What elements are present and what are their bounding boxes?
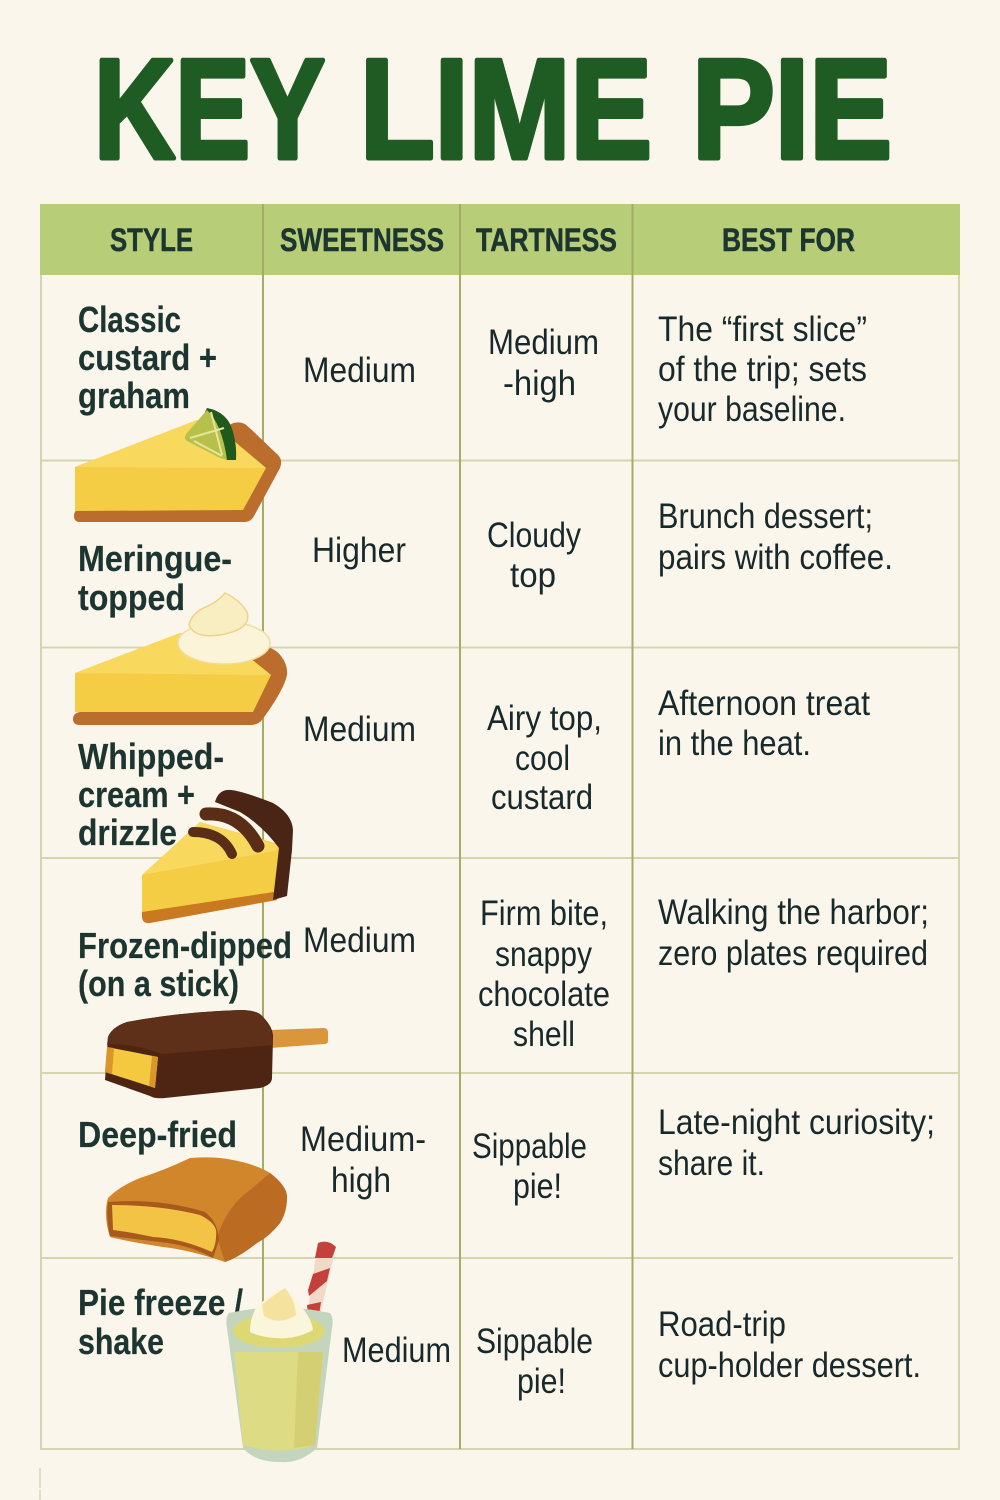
- tartness column: [472, 323, 610, 1401]
- style column labels: graham: [78, 375, 190, 416]
- tartness column: shell: [513, 1015, 575, 1054]
- tartness column: Firm bite,: [480, 894, 608, 933]
- icon: deep-fried pie: [106, 1157, 287, 1262]
- tartness column: cool: [515, 739, 570, 778]
- sweetness column: Medium-: [300, 1120, 426, 1159]
- tartness column: snappy: [495, 935, 592, 974]
- sweetness column: high: [331, 1161, 391, 1200]
- icon: frozen chocolate-dipped pie on a stick: [105, 1010, 328, 1098]
- best for column: pairs with coffee.: [658, 538, 893, 577]
- style column labels: Pie freeze /: [78, 1282, 243, 1323]
- best for column: The “first slice”: [658, 310, 867, 349]
- sweetness column: Medium: [342, 1331, 451, 1370]
- sweetness column: Higher: [312, 531, 406, 570]
- tartness column: chocolate: [478, 975, 610, 1014]
- sweetness column: [300, 351, 451, 1370]
- best for column: of the trip; sets: [658, 350, 867, 389]
- sweetness column: Medium: [303, 710, 416, 749]
- best for column: Brunch dessert;: [658, 497, 873, 536]
- style column labels: cream +: [78, 774, 195, 815]
- best for column: your baseline.: [658, 390, 846, 429]
- icon: whipped-cream and drizzle pie slice: [142, 790, 293, 923]
- tartness column: -high: [503, 364, 576, 403]
- best for column: cup-holder dessert.: [658, 1346, 921, 1385]
- sweetness column: Medium: [303, 921, 416, 960]
- best for column: in the heat.: [658, 724, 811, 763]
- table header row: BEST FOR: [722, 222, 855, 258]
- icon: pie freeze shake in glass: [226, 1242, 336, 1462]
- style column labels: topped: [78, 577, 185, 618]
- tartness column: Cloudy: [487, 516, 581, 555]
- tartness column: Sippable: [476, 1322, 593, 1361]
- table header row: [110, 222, 855, 258]
- best for column: Afternoon treat: [658, 684, 870, 723]
- best for column: Road-trip: [658, 1305, 786, 1344]
- tartness column: Airy top,: [487, 699, 602, 738]
- style column labels: Meringue-: [78, 538, 232, 579]
- best for column: zero plates required: [658, 934, 928, 973]
- style column labels: custard +: [78, 337, 217, 378]
- style column labels: Classic: [78, 299, 181, 340]
- style column labels: drizzle: [78, 812, 177, 853]
- tartness column: top: [510, 556, 556, 595]
- best for column: Late-night curiosity;: [658, 1103, 935, 1142]
- table grid: [40, 204, 960, 1500]
- title: [94, 30, 892, 189]
- icon: classic pie slice with lime: [74, 408, 281, 522]
- tartness column: pie!: [513, 1167, 562, 1206]
- table header row: SWEETNESS: [280, 222, 444, 258]
- sweetness column: Medium: [303, 351, 416, 390]
- best for column: [658, 310, 935, 1385]
- tartness column: custard: [491, 778, 593, 817]
- title: PIE: [692, 30, 892, 189]
- style column labels: Whipped-: [78, 736, 224, 777]
- table header row: STYLE: [110, 222, 193, 258]
- style column labels: Frozen-dipped: [78, 925, 292, 966]
- tartness column: Medium: [488, 323, 599, 362]
- style column labels: [78, 299, 292, 1362]
- style column labels: (on a stick): [78, 963, 239, 1004]
- tartness column: pie!: [517, 1362, 566, 1401]
- title: KEY: [94, 30, 325, 189]
- best for column: share it.: [658, 1144, 765, 1183]
- icon: meringue-topped pie slice: [73, 593, 287, 725]
- style column labels: shake: [78, 1321, 164, 1362]
- title: LIME: [360, 30, 652, 189]
- best for column: Walking the harbor;: [658, 893, 929, 932]
- table header row: TARTNESS: [476, 222, 617, 258]
- tartness column: Sippable: [472, 1127, 587, 1166]
- style column labels: Deep-fried: [78, 1114, 237, 1155]
